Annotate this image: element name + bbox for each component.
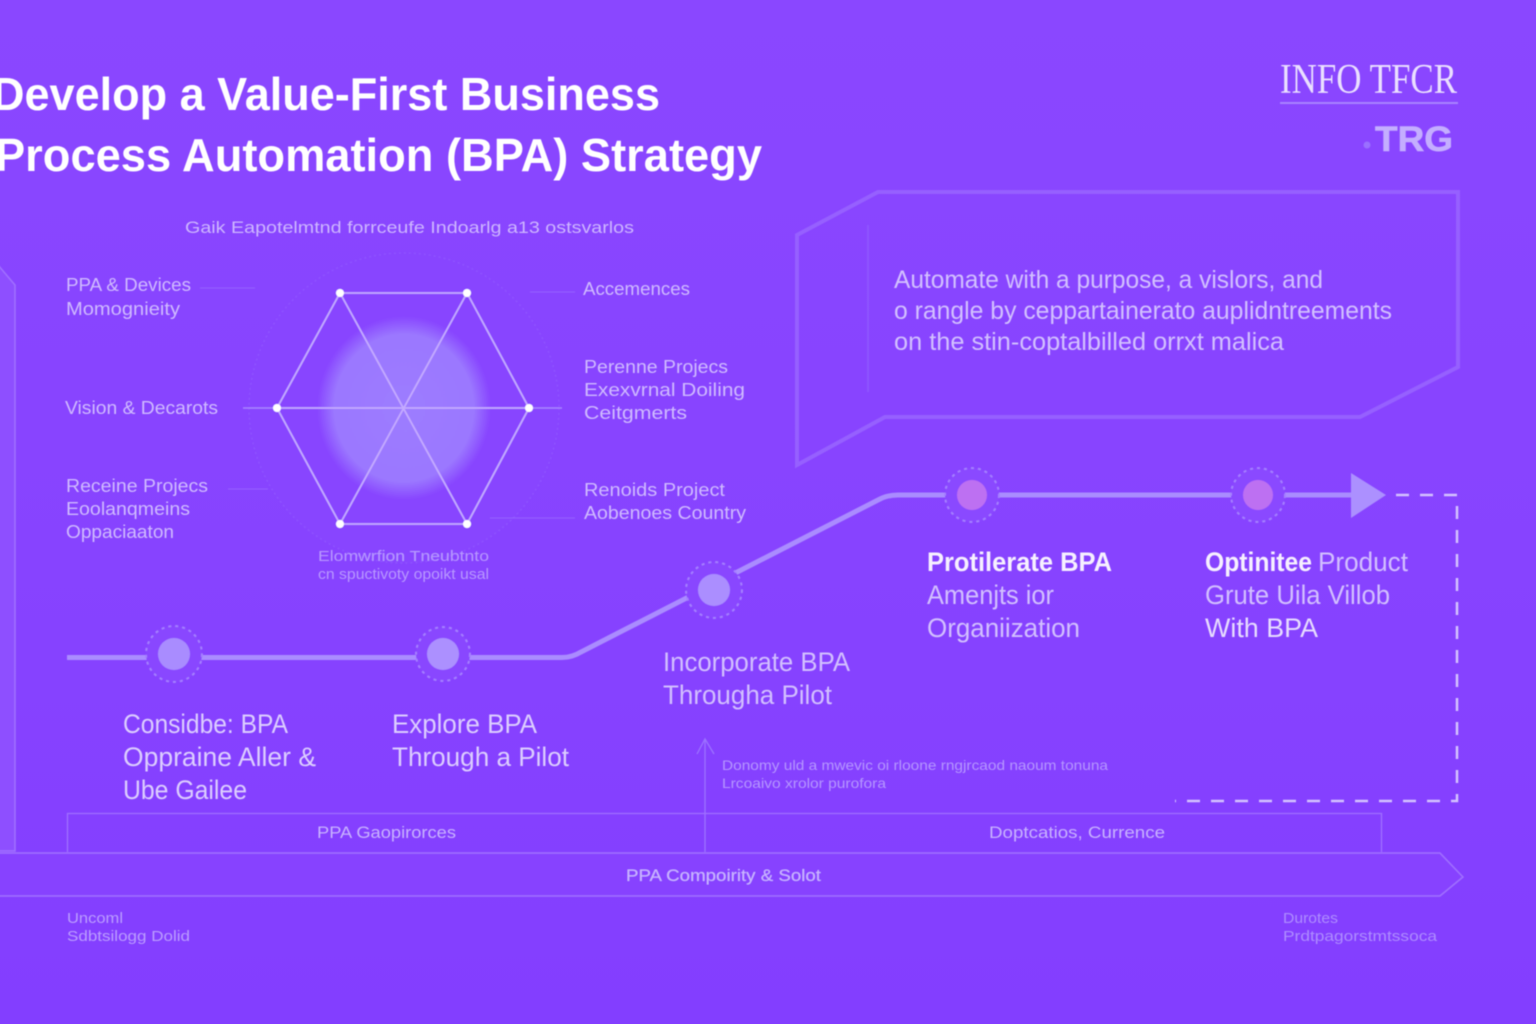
footnote right [1283,910,1438,945]
step node 1 [146,626,202,682]
diagram subtitle: Gaik Eapotelmtnd forrceufe Indoarlg a13 ostsvarlos [185,218,634,237]
title: Develop a Value-First Business [0,68,660,120]
callout text: on the stin-coptalbilled orrxt malica [894,328,1284,356]
left edge panel [0,265,15,851]
step label 5: Product [1318,547,1408,577]
step label 1 [123,709,316,805]
step label 5: Optinitee [1205,547,1312,577]
hexagon labels: left: Receine Projecs [66,476,208,496]
hexagon labels: right [583,279,746,523]
step node 3 [686,562,742,618]
hexagon labels: right: Perenne Projecs [584,357,728,377]
footnote right: Prdtpagorstmtssoca [1283,928,1438,945]
step label 5: Grute Uila Villob [1205,580,1390,610]
hexagon caption: Elomwrfion Tneubtnto [318,548,489,565]
step label 3: Incorporate BPA [663,647,850,677]
step label 4: Amenjts ior [927,580,1054,610]
footnote right: Durotes [1283,910,1338,927]
logo: Info-Tech: INFO TFCR [1280,57,1457,103]
step label 3: Througha Pilot [663,680,832,710]
step label 2: Through a Pilot [392,742,569,772]
bottom capability box: PPA Gaopirorces [317,823,456,842]
foundation arrow band [0,853,1463,896]
small note: Donomy uld a mwevic oi rloone rngjrcaod naoum tonuna [722,757,1108,773]
step label 5 [1205,547,1408,643]
step label 2 [392,709,569,772]
foundation arrow band: PPA Compoirity & Solot [626,866,821,885]
step label 4: Protilerate BPA [927,547,1112,577]
step label 1: Considbe: BPA [123,709,288,739]
callout text: o rangle by ceppartainerato auplidntreements [894,297,1392,325]
hexagon labels: left: Eoolanqmeins [66,499,190,519]
hexagon labels: right: Exexvrnal Doiling [584,380,745,400]
timeline path [67,495,1355,658]
hexagon labels: right: Ceitgmerts [584,403,687,423]
hexagon labels: left: Vision & Decarots [65,398,218,418]
upward arrow [697,739,714,852]
step label 2: Explore BPA [392,709,537,739]
bottom capability box: Doptcatios, Currence [989,823,1165,842]
title: Process Automation (BPA) Strategy [0,129,762,181]
step label 1: Ube Gailee [123,775,247,805]
small note [722,757,1108,791]
callout panel [797,192,1458,465]
small note: Lrcoaivo xrolor purofora [722,775,886,791]
dashed feedback line [1175,495,1457,801]
hexagon labels: right: Accemences [583,279,690,299]
hexagon labels: left: PPA & Devices [66,275,191,295]
hexagon diagram [200,253,575,563]
step node 4 [945,468,999,522]
step label 3 [663,647,850,710]
footnote left: Sdbtsilogg Dolid [67,928,190,945]
hexagon labels: right: Aobenoes Country [584,503,746,523]
step label 1: Oppraine Aller & [123,742,316,772]
hexagon labels: left: Momognieity [66,299,180,319]
step node 5 [1231,468,1285,522]
step label 5: With BPA [1205,613,1318,643]
hexagon labels: left [65,275,218,542]
callout text [894,266,1392,356]
step label 4: Organiization [927,613,1080,643]
step label 4 [927,547,1112,643]
step node 2 [416,627,470,681]
logo: TRG: TRG [1375,120,1453,159]
hexagon labels: right: Renoids Project [584,480,725,500]
callout text: Automate with a purpose, a vislors, and [894,266,1323,294]
hexagon caption [318,548,489,583]
arrowhead [1351,473,1386,518]
footnote left [67,910,190,945]
title [0,68,762,181]
bottom capability box [68,814,1382,852]
hexagon caption: cn spuctivoty opoikt usal [318,566,489,583]
footnote left: Uncoml [67,910,123,927]
hexagon labels: left: Oppaciaaton [66,522,174,542]
